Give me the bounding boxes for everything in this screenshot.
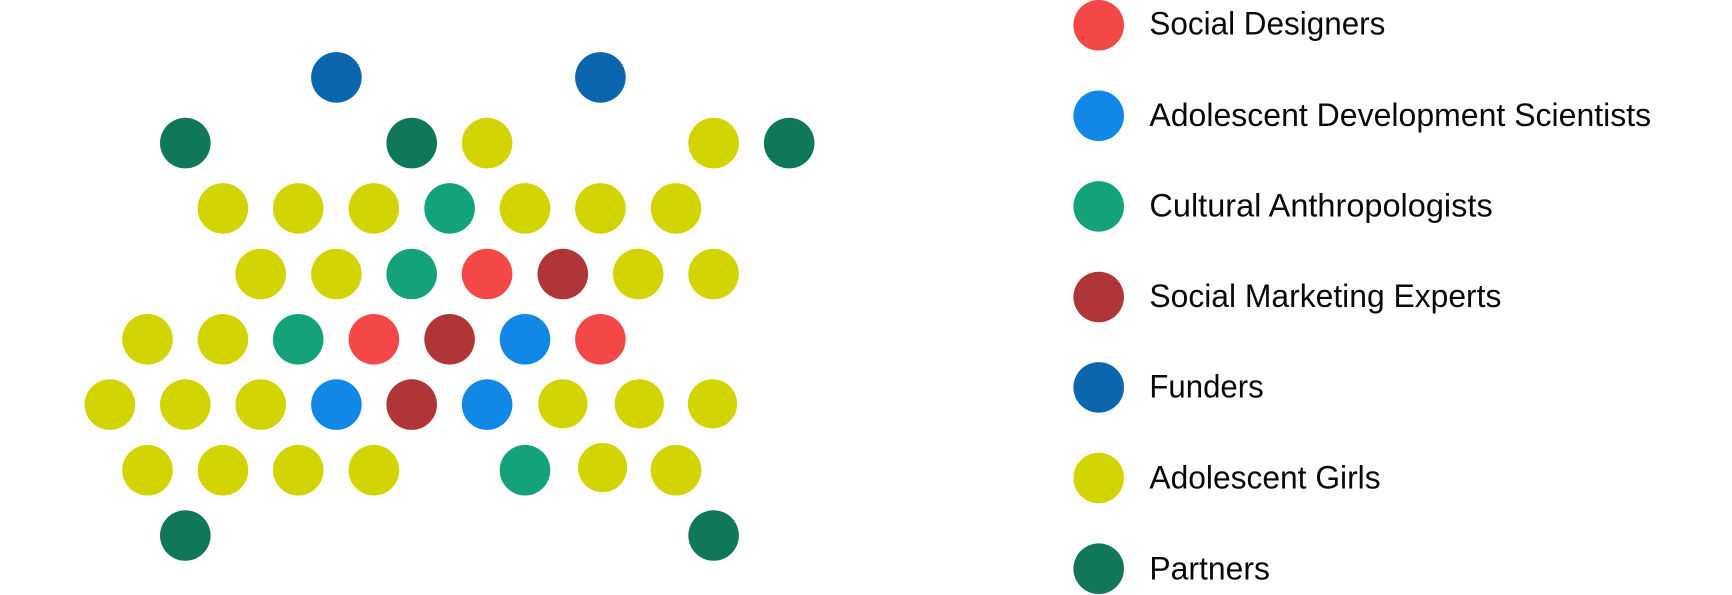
- legend item: Social Marketing Experts: [1073, 272, 1501, 322]
- row 8: partners: [160, 510, 739, 561]
- row 2: partners and girls: [160, 118, 814, 168]
- row 3: girls and anthropologist: [198, 183, 701, 234]
- legend item: Adolescent Development Scientists: Adolescent Development Scientists: [1149, 97, 1651, 133]
- legend item: Adolescent Girls: [1073, 453, 1381, 503]
- legend item: Cultural Anthropologists: [1073, 181, 1493, 232]
- legend item: Social Designers: Social Designers: [1149, 6, 1385, 42]
- row 7: girls and anthropologist: [122, 443, 701, 496]
- dot cluster chart: [85, 52, 815, 561]
- legend item: Adolescent Development Scientists: [1073, 90, 1651, 141]
- legend item: Partners: [1073, 543, 1270, 594]
- legend item: Social Designers: [1073, 0, 1385, 50]
- row 6: girls, scientists, marketer: [85, 379, 737, 430]
- legend item: Cultural Anthropologists: Cultural Anthropologists: [1149, 188, 1493, 224]
- row 1: funders: [311, 52, 626, 103]
- legend item: Adolescent Girls: Adolescent Girls: [1149, 460, 1381, 496]
- row 4: girls, anthropologist, designer, marketer: [235, 249, 739, 299]
- legend item: Social Marketing Experts: Social Marketing Experts: [1149, 278, 1501, 314]
- legend: [1073, 0, 1651, 594]
- row 5: girls, anthropologist, designers, marketer, scientist: [122, 314, 626, 365]
- legend item: Funders: [1073, 362, 1264, 413]
- legend item: Partners: Partners: [1149, 550, 1270, 586]
- legend item: Funders: Funders: [1149, 368, 1264, 404]
